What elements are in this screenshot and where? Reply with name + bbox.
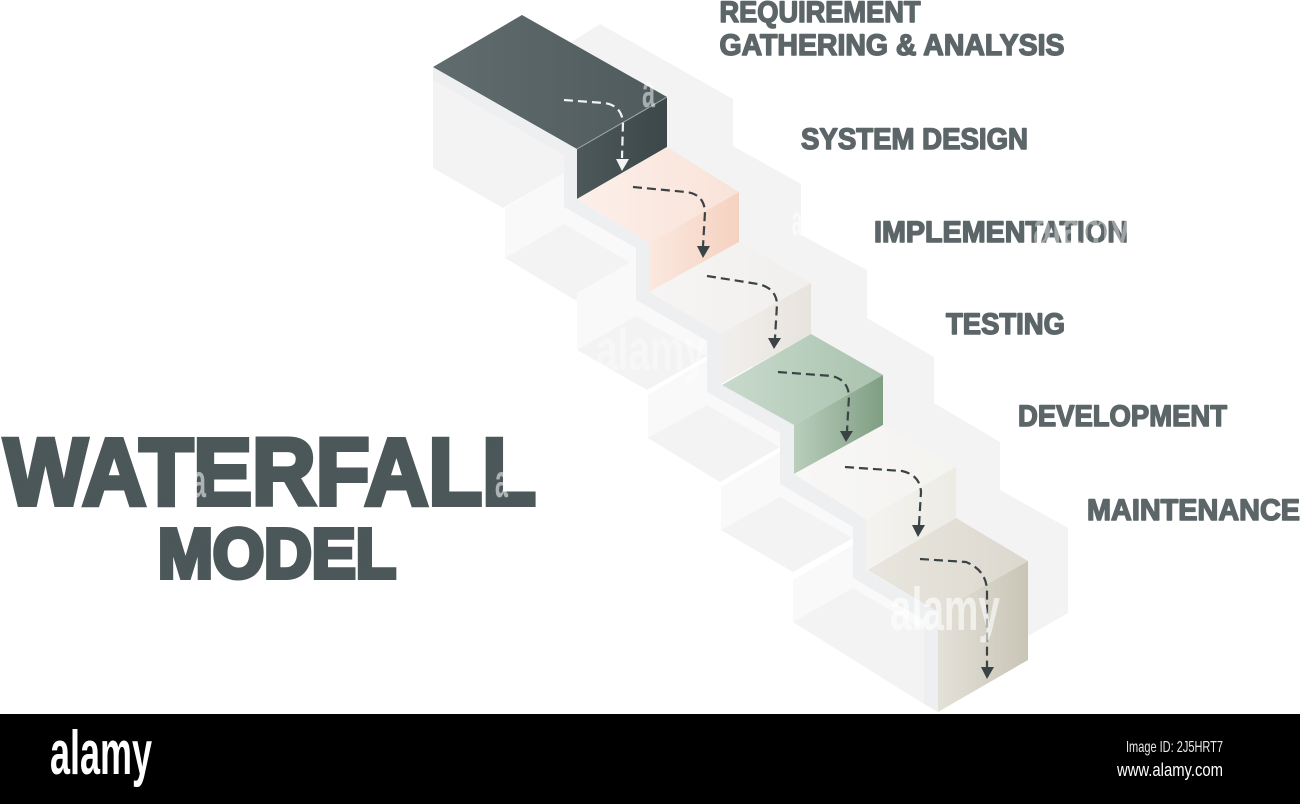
step 5: development block: [794, 425, 956, 570]
arrow: step 6 down: [920, 559, 994, 679]
label: requirement gathering and analysis: [720, 0, 1064, 62]
footer bar: [0, 714, 1300, 804]
step 4: testing block: [722, 334, 883, 474]
watermarks: a: [792, 197, 802, 244]
watermarks: [192, 65, 1130, 643]
title: MODEL: [158, 514, 396, 592]
watermarks: alamy: [596, 318, 706, 383]
watermarks: a: [495, 455, 508, 507]
arrow: step 5 to step 6: [845, 467, 925, 537]
label: implementation: IMPLEMENTATION: [874, 216, 1128, 249]
step 1: requirement block: [433, 15, 667, 199]
label: testing: TESTING: [946, 308, 1065, 341]
step 2: system design block: [577, 147, 739, 292]
step 6: maintenance block: [867, 518, 1028, 712]
step 3: implementation block: [649, 242, 811, 384]
watermarks: alamy: [890, 576, 1000, 643]
watermarks: a: [192, 455, 206, 507]
watermarks: a: [642, 65, 655, 117]
label: development: DEVELOPMENT: [1018, 400, 1227, 433]
arrow: step 4 to step 5: [778, 372, 853, 442]
title: WATERFALL: [4, 420, 536, 526]
light grey edge stripe following the stairs: [433, 67, 938, 712]
watermarks: alamy: [1033, 203, 1130, 256]
footer image id: Image ID: 2J5HRT7: [1126, 739, 1223, 756]
arrow: step 1 to step 2: [564, 100, 629, 171]
footer url: www.alamy.com: [1116, 760, 1223, 780]
arrow: step 2 to step 3: [633, 187, 710, 258]
footer logo: alamy: [50, 719, 152, 788]
title: [4, 420, 536, 592]
label: maintenance: MAINTENANCE: [1087, 494, 1300, 527]
arrow: step 3 to step 4: [707, 276, 781, 349]
label: requirement gathering and analysis: GATHERING & ANALYSIS: [720, 29, 1064, 62]
ghost left walls of the staircase: [433, 67, 924, 704]
ghost back wall of the staircase: [568, 24, 1068, 636]
label: system design: SYSTEM DESIGN: [801, 123, 1028, 156]
